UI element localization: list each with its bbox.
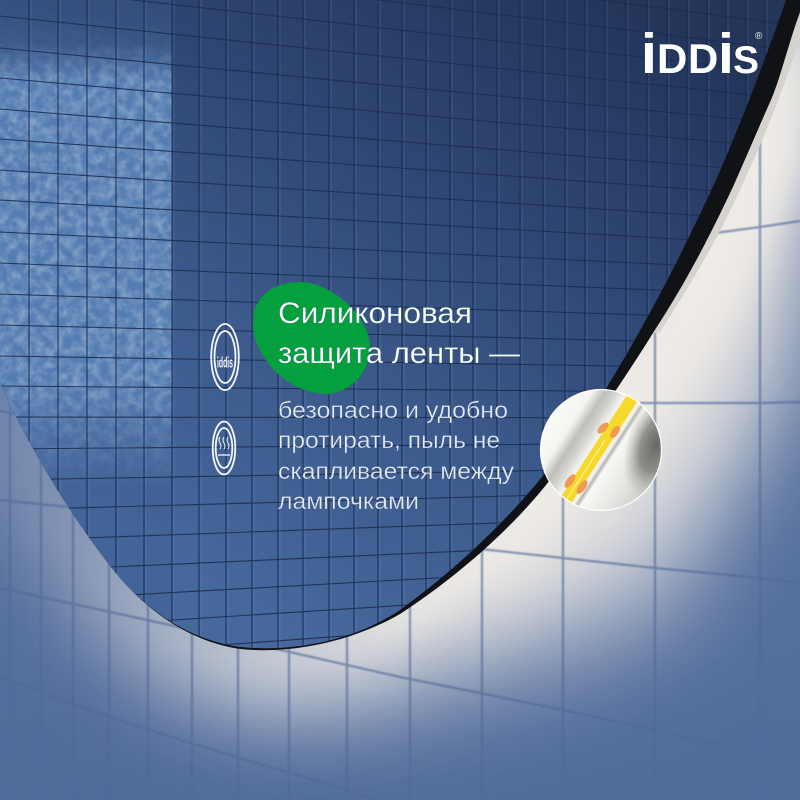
logo: iDDiS: S xyxy=(733,39,759,82)
yellow LED strip xyxy=(562,396,637,502)
heading xyxy=(278,297,520,370)
icon: logo touch button: iddis xyxy=(217,356,233,371)
description text xyxy=(278,397,514,514)
green accent blob xyxy=(253,282,370,394)
heading: защита ленты — xyxy=(278,337,520,370)
orange solder pads xyxy=(564,422,620,494)
description text: скапливается между xyxy=(278,458,514,484)
mosaic highlight lines xyxy=(31,0,767,660)
description text: протирать, пыль не xyxy=(278,427,500,453)
icon: anti-fog heating button xyxy=(213,422,235,474)
silver edge strip of the frame xyxy=(653,14,800,333)
logo: iDDiS: i xyxy=(718,22,734,86)
logo: iDDiS xyxy=(641,22,763,86)
logo: iDDiS: D xyxy=(688,35,718,82)
description text: лампочками xyxy=(278,488,419,514)
heading: Силиконовая xyxy=(278,297,472,330)
icon: logo touch button xyxy=(211,324,239,390)
logo: iDDiS: ® xyxy=(755,31,763,42)
description text: безопасно и удобно xyxy=(278,397,508,423)
logo: iDDiS: D xyxy=(657,35,687,82)
logo: iDDiS: i xyxy=(641,22,657,86)
callout: magnified LED strip xyxy=(540,388,662,511)
mottled tile patch xyxy=(0,10,172,490)
